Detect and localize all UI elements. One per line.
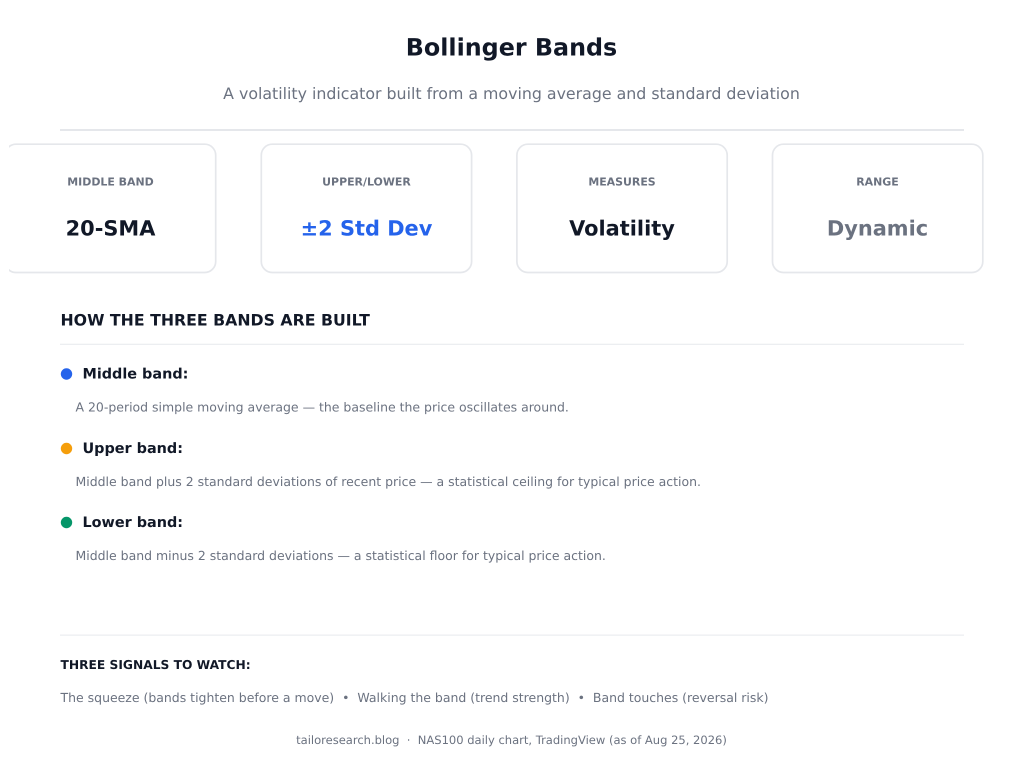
section heading: HOW THE THREE BANDS ARE BUILT [60, 310, 370, 330]
icon: amber dot [61, 443, 72, 454]
card: measures: Volatility [569, 216, 675, 240]
icon: blue dot [61, 368, 72, 380]
card: range: Dynamic [827, 216, 928, 240]
signals heading: THREE SIGNALS TO WATCH: [60, 658, 251, 672]
card: measures [517, 144, 727, 272]
description: middle band: A 20-period simple moving average — the baseline the price oscillates around. [76, 400, 569, 414]
card: middle band [5, 144, 216, 272]
label: upper band: Upper band: [82, 441, 183, 457]
subtitle: A volatility indicator built from a moving average and standard deviation [223, 84, 800, 103]
panel: stat cards [5, 144, 983, 272]
list: band definitions [61, 366, 701, 563]
card: range: RANGE [856, 176, 899, 188]
description: upper band: Middle band plus 2 standard deviations of recent price — a statistical ceiling for typical price action. [76, 474, 701, 489]
card: range [772, 144, 983, 272]
card: middle band: 20-SMA [66, 216, 156, 240]
title: Bollinger Bands [406, 34, 617, 62]
card: upper/lower [261, 144, 472, 272]
label: middle band: Middle band: [82, 366, 188, 382]
icon: green dot [61, 517, 72, 528]
footer: tailoresearch.blog · NAS100 daily chart, TradingView (as of Aug 25, 2026) [296, 733, 727, 747]
card: upper/lower: ±2 Std Dev [301, 216, 433, 240]
card: middle band: MIDDLE BAND [67, 176, 154, 188]
signals text: The squeeze (bands tighten before a move) • Walking the band (trend strength) • Band touches (reversal risk) [60, 690, 768, 705]
card: upper/lower: UPPER/LOWER [322, 176, 411, 188]
card: measures: MEASURES [588, 176, 656, 188]
label: lower band: Lower band: [82, 515, 183, 531]
description: lower band: Middle band minus 2 standard deviations — a statistical floor for typical price action. [76, 548, 606, 563]
